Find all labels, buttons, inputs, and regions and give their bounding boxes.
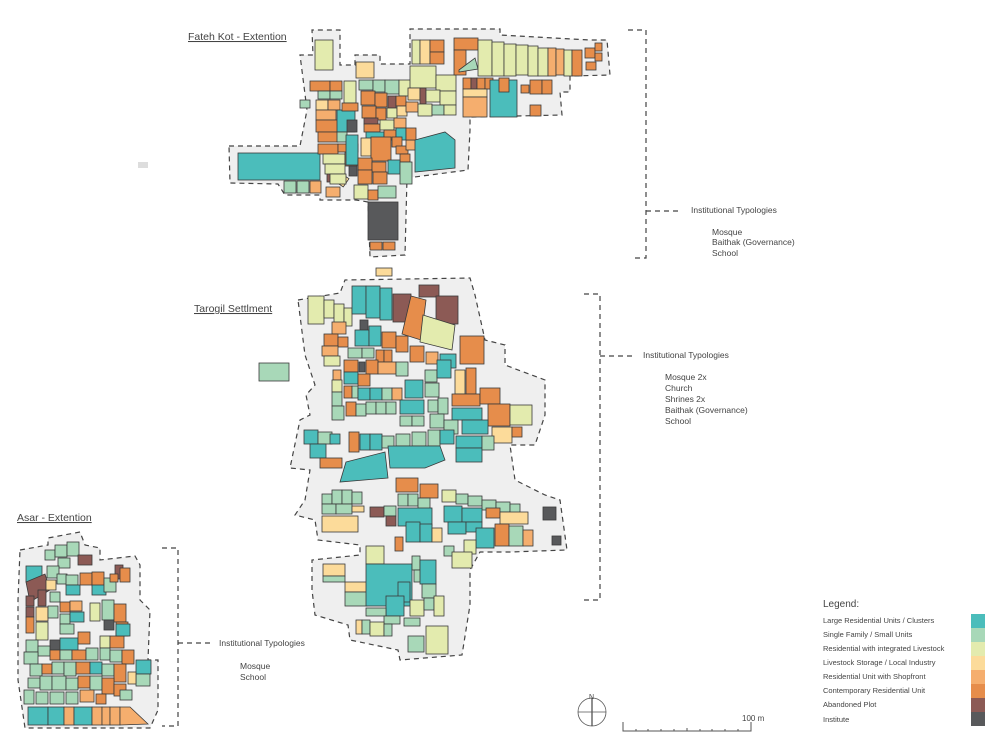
scale bar [623, 714, 765, 731]
bracket: Fateh Kot typologies: Institutional Typologies [691, 205, 777, 215]
legend: Livestock Storage / Local Industry [823, 658, 936, 667]
legend: Legend: [823, 599, 859, 610]
bracket: Fateh Kot typologies: Mosque [712, 227, 743, 237]
bracket: Fateh Kot typologies: Baithak (Governance) [712, 237, 795, 247]
bracket: Tarogil typologies: Institutional Typologies [643, 350, 729, 360]
center cluster [356, 62, 374, 78]
bracket: Fateh Kot typologies: School [712, 248, 738, 258]
bracket: Tarogil typologies: Shrines 2x [665, 394, 706, 404]
map: Asar settlement [18, 532, 158, 728]
legend: Residential with integrated Livestock [823, 644, 945, 653]
bracket: Tarogil typologies: Mosque 2x [665, 372, 707, 382]
bracket: Tarogil typologies: Church [665, 383, 693, 393]
title: Fateh Kot: Fateh Kot - Extention [188, 31, 287, 43]
lower center [361, 138, 371, 156]
map: Fateh Kot settlement [229, 29, 610, 257]
bracket: Tarogil typologies: Baithak (Governance) [665, 405, 748, 415]
icon: north arrow [578, 694, 606, 726]
small grey markers [138, 162, 148, 168]
south belt [304, 430, 318, 444]
right cluster [412, 40, 420, 64]
bracket: Asar typologies [162, 548, 305, 726]
bracket: Tarogil typologies: School [665, 416, 691, 426]
map: Tarogil settlement [259, 268, 567, 660]
north [308, 296, 324, 324]
middle ring [333, 370, 341, 380]
left cluster [310, 81, 330, 91]
bracket: Tarogil typologies [584, 294, 748, 600]
legend: Large Residential Units / Clusters [823, 616, 935, 625]
bracket: Asar typologies: School [240, 672, 266, 682]
legend: Institute [823, 715, 849, 724]
title: Asar: Asar - Extention [17, 512, 92, 524]
bracket: Fateh Kot typologies [628, 30, 795, 258]
bracket: Asar typologies: Institutional Typologies [219, 638, 305, 648]
legend: Abandoned Plot [823, 700, 877, 709]
scale bar: 100 m [742, 714, 765, 723]
bracket: Asar typologies: Mosque [240, 661, 271, 671]
legend: Single Family / Small Units [823, 630, 912, 639]
icon: north arrow: N [589, 694, 594, 701]
legend: Contemporary Residential Unit [823, 686, 926, 695]
far south [366, 546, 384, 564]
legend [823, 599, 985, 726]
title: Tarogil: Tarogil Settlment [194, 303, 272, 315]
legend: Residential Unit with Shopfront [823, 672, 926, 681]
